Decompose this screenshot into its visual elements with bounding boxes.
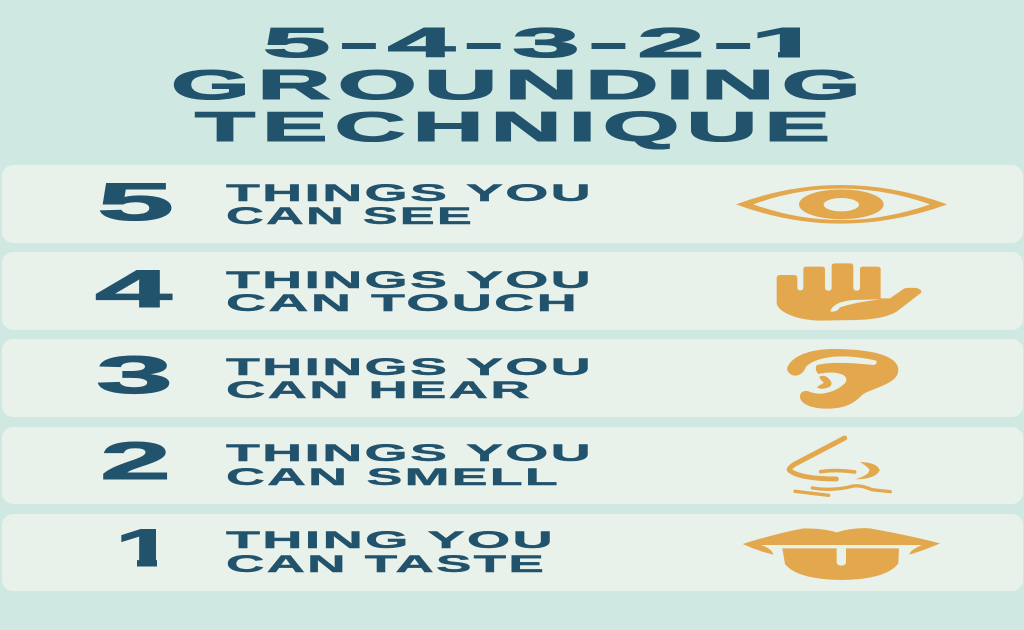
- label: things you can smell: [226, 440, 593, 491]
- title: TECHNIQUE: [195, 103, 837, 150]
- label: things you can smell: CAN SMELL: [226, 464, 560, 491]
- label: things you can hear: THINGS YOU: [226, 354, 593, 381]
- panel: 1 thing you can taste: [2, 514, 1023, 591]
- title: [171, 19, 868, 150]
- number 3: 3: [96, 346, 173, 405]
- number 4: 4: [95, 260, 173, 319]
- label: thing you can taste: THING YOU: [226, 527, 555, 554]
- number 1: 1: [115, 519, 175, 578]
- label: things you can hear: CAN HEAR: [226, 377, 532, 404]
- panel: 3 things you can hear: [2, 339, 1023, 417]
- panel: 2 things you can smell: [2, 427, 1023, 504]
- number 2: 2: [100, 432, 171, 491]
- label: things you can see: CAN SEE: [226, 203, 474, 230]
- label: things you can touch: THINGS YOU: [226, 267, 593, 294]
- label: things you can see: [226, 180, 593, 230]
- label: things you can touch: CAN TOUCH: [226, 290, 579, 317]
- title: 5-4-3-2-: [263, 19, 762, 66]
- panel: 5 things you can see: [2, 165, 1023, 243]
- icon: mouth and tongue: [743, 528, 940, 580]
- icon: hand: [777, 263, 921, 321]
- icon: eye: [736, 185, 947, 224]
- label: thing you can taste: CAN TASTE: [226, 551, 546, 578]
- number 5: 5: [97, 173, 174, 232]
- label: things you can smell: THINGS YOU: [226, 440, 593, 467]
- label: things you can touch: [226, 267, 593, 317]
- label: things you can hear: [226, 354, 593, 404]
- label: thing you can taste: [226, 527, 555, 578]
- icon: nose: [789, 438, 890, 495]
- panel: 4 things you can touch: [2, 252, 1023, 330]
- title: 1: [750, 19, 835, 66]
- label: things you can see: THINGS YOU: [226, 180, 593, 207]
- title: GROUNDING: [171, 61, 868, 108]
- icon: ear: [787, 349, 898, 409]
